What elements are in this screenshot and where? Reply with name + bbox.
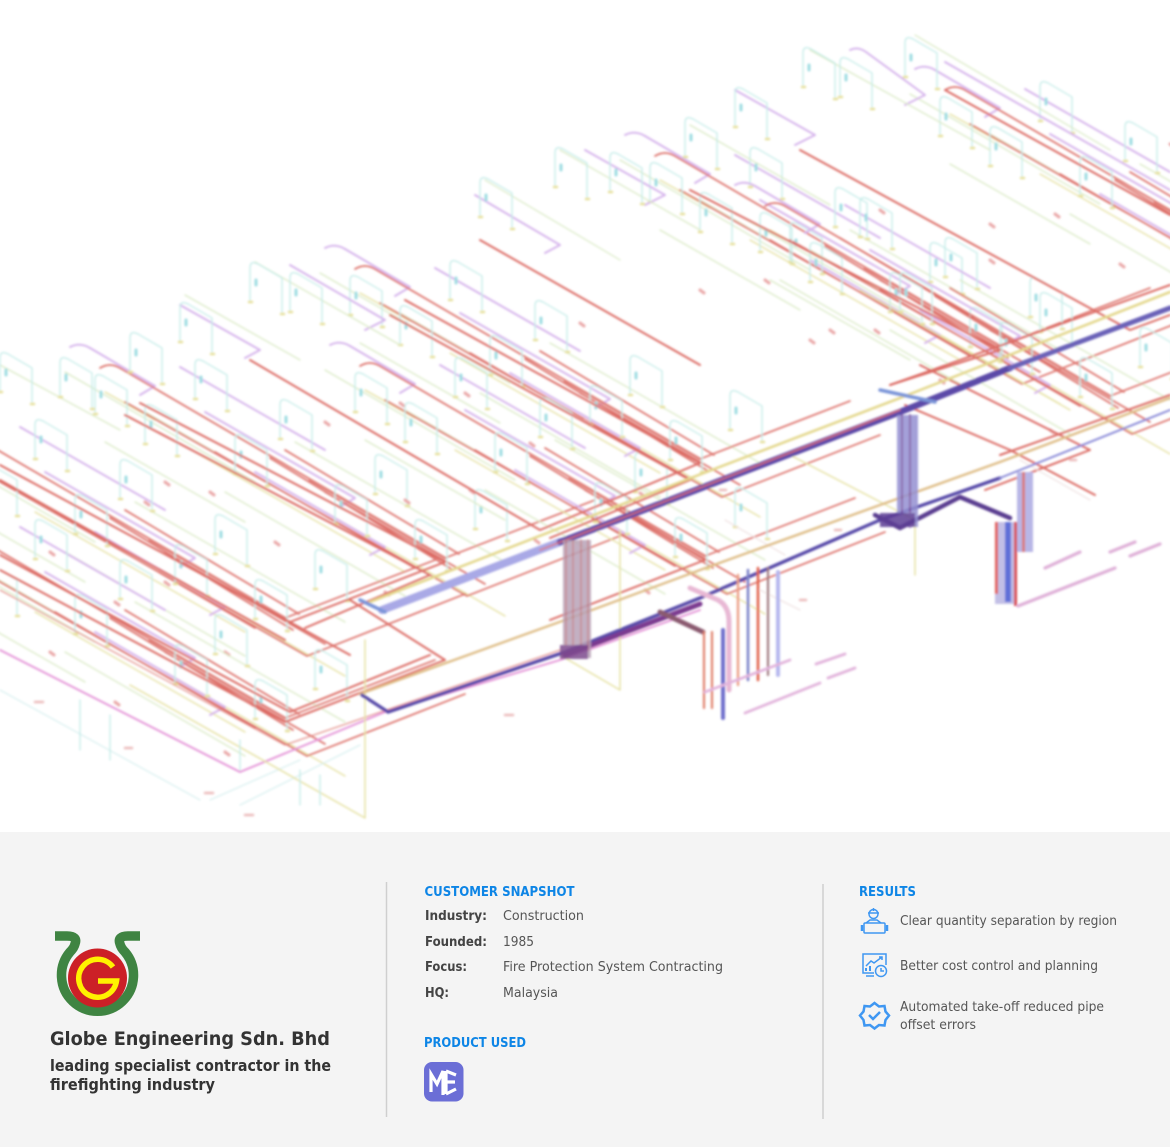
heading: product used: PRODUCT USED — [424, 1035, 526, 1051]
pipe bays lower level — [0, 183, 1170, 776]
lower main pipe — [360, 398, 1170, 712]
customer details: Construction — [503, 908, 584, 924]
customer details: Industry: — [425, 908, 487, 924]
result 1 — [862, 908, 1117, 933]
top edge branches and hooks — [0, 35, 1170, 430]
icon: verified badge — [860, 1003, 889, 1028]
customer details: Founded: — [425, 934, 487, 950]
icon: worker with plan — [862, 908, 887, 933]
riser bundle lower centre — [690, 568, 855, 718]
result 3: Automated take-off reduced pipe — [900, 999, 1104, 1015]
main red branch lines — [0, 90, 1170, 722]
customer details — [425, 908, 723, 1001]
riser right — [995, 472, 1160, 606]
icon: ME product — [424, 1062, 464, 1102]
heading: results: RESULTS — [859, 884, 916, 900]
isometric pipe drawing — [0, 34, 1170, 820]
customer details: Focus: — [425, 959, 467, 975]
outer magenta and low detail lines — [0, 455, 1090, 818]
pipe bays upper level — [0, 67, 1170, 676]
result 3: offset errors — [900, 1017, 976, 1033]
footer band — [0, 832, 1170, 1147]
company name: Globe Engineering Sdn. Bhd — [50, 1028, 330, 1050]
riser centre — [880, 415, 918, 527]
customer details: Malaysia — [503, 985, 558, 1001]
heading: customer snapshot: CUSTOMER SNAPSHOT — [424, 884, 575, 900]
logo — [55, 936, 140, 1011]
company description — [50, 1056, 331, 1094]
customer details: HQ: — [425, 985, 449, 1001]
riser left — [560, 540, 591, 659]
company description: firefighting industry — [50, 1075, 216, 1094]
result 3 — [860, 999, 1104, 1033]
icon: chart and clock — [863, 954, 886, 976]
customer details: Fire Protection System Contracting — [503, 959, 723, 975]
customer details: 1985 — [503, 934, 534, 950]
upper main pipe — [360, 292, 1170, 612]
result 2 — [863, 954, 1098, 976]
company description: leading specialist contractor in the — [50, 1056, 331, 1075]
result 2: Better cost control and planning — [900, 958, 1098, 974]
result 1: Clear quantity separation by region — [900, 913, 1117, 929]
